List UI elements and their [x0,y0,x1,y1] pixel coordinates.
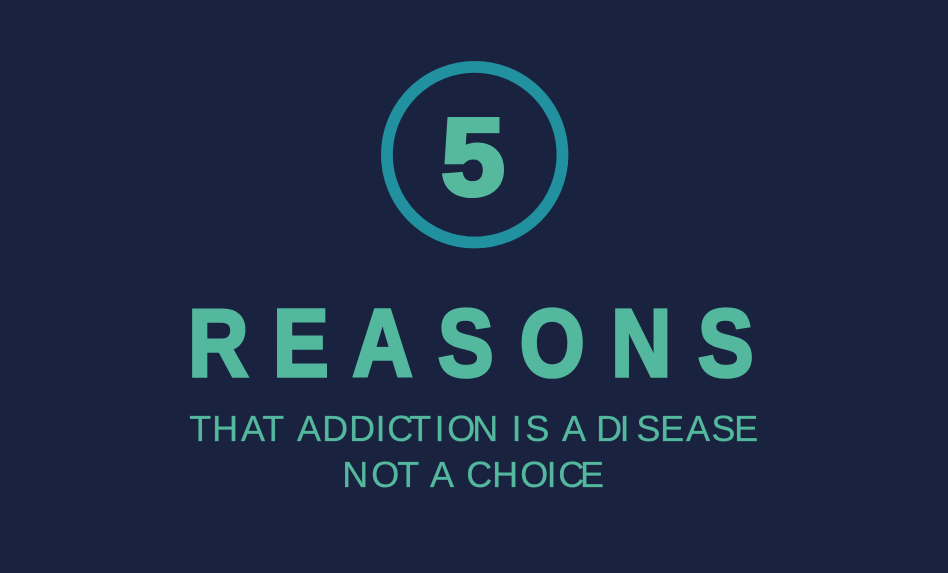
heading: REASONS: REASONS [188,291,754,397]
subtitle line 2: NOT A CHOICE [342,454,604,495]
subtitle line 1: THAT ADDICTION IS A DISEASE [189,408,758,449]
ring [387,67,562,242]
subtitle [189,408,758,495]
badge: numeral 5 in ring [387,67,562,242]
numeral 5: 5 [442,95,505,218]
